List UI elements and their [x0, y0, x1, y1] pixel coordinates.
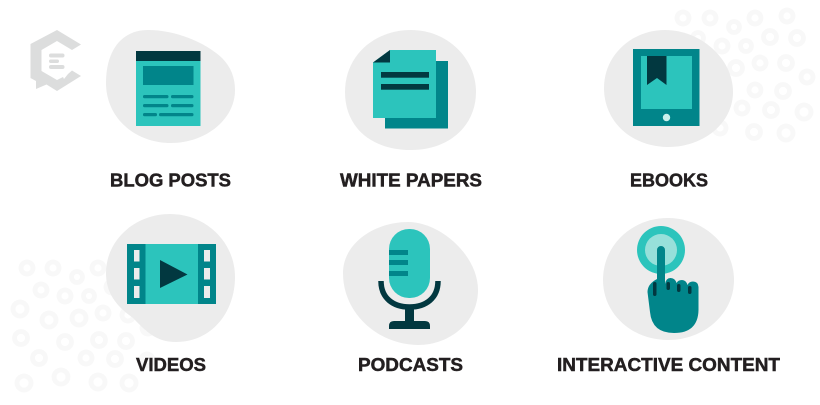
label: EBOOKS	[630, 170, 708, 190]
blob background	[106, 214, 235, 342]
label: PODCASTS	[358, 354, 463, 375]
background dots: bottom left	[13, 262, 154, 390]
panel: videos	[106, 214, 235, 375]
blob background	[604, 30, 733, 147]
panel: podcasts	[343, 222, 478, 375]
blob background	[345, 30, 476, 150]
icon: tablet	[633, 49, 700, 126]
label: INTERACTIVE CONTENT	[557, 354, 781, 375]
icon: film strip	[127, 244, 216, 304]
background dots: top right	[677, 10, 813, 140]
blob background	[343, 222, 478, 345]
blob background	[106, 30, 235, 143]
panel: blog posts	[106, 30, 235, 190]
label: BLOG POSTS	[110, 170, 231, 190]
icon: blog page	[136, 51, 200, 126]
icon: documents	[373, 50, 448, 128]
icon: finger tap	[637, 226, 698, 333]
logo	[30, 30, 81, 91]
icon: microphone	[381, 229, 438, 329]
label: VIDEOS	[136, 354, 206, 375]
panel: interactive content	[557, 218, 781, 375]
panel: ebooks	[604, 30, 733, 190]
label: WHITE PAPERS	[340, 170, 482, 190]
blob background	[603, 218, 734, 340]
panel: white papers	[340, 30, 482, 190]
